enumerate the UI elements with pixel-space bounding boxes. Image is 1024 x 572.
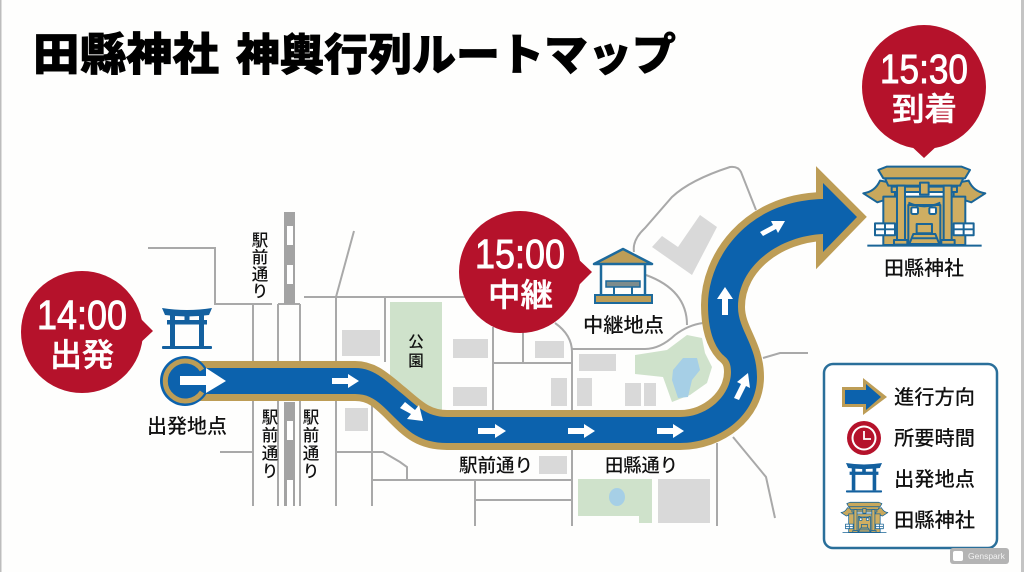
callout: 15:30 arrival: [862, 25, 986, 158]
callout: 15:30 arrival: 15:30: [880, 46, 968, 92]
title: 神輿行列ルートマップ: [236, 31, 676, 80]
label: station street lower right: 駅: [303, 409, 320, 427]
label: park: 公: [408, 333, 424, 351]
title: 田縣神社: [33, 29, 219, 80]
label: station street top: り: [252, 283, 268, 301]
badge: Genspark: Genspark: [968, 551, 1006, 561]
parks and water: [390, 302, 712, 523]
map base: roads, blocks and parks: [148, 167, 808, 526]
panel: legend: [824, 364, 997, 548]
label: station street lower left: 前: [262, 426, 278, 445]
route band with arrowhead: [160, 183, 857, 443]
legend icon: torii: [846, 463, 882, 493]
legend text: time required: 所要時間: [894, 427, 975, 450]
badge: Genspark: [950, 548, 1009, 564]
label: relay point: 中継地点: [583, 314, 664, 337]
route arrows: [332, 221, 785, 438]
legend icon: clock: [847, 421, 881, 455]
callout: 15:00 relay: 15:00: [475, 231, 565, 277]
label: station street horizontal: 駅前通り: [459, 455, 533, 476]
title: [33, 29, 676, 80]
label: station street lower left: 通: [262, 444, 279, 463]
icon: Agata shrine: [863, 167, 985, 246]
start marker: [160, 356, 226, 406]
legend text: departure point: 出発地点: [894, 468, 975, 491]
buildings: [342, 215, 717, 523]
label: station street top: 通: [252, 265, 269, 284]
label: station street lower right: 通: [303, 444, 320, 463]
legend icon: direction arrow: [842, 378, 887, 415]
icon: torii gate at departure: [162, 308, 212, 349]
label: park: 園: [408, 353, 424, 370]
label: station street top: 前: [252, 248, 268, 267]
callout: 14:00 departure: 14:00: [37, 292, 127, 338]
label: departure point: 出発地点: [147, 415, 227, 438]
callout: 15:00 relay: 中継: [488, 277, 553, 313]
label: station street lower left: 駅: [262, 409, 279, 427]
label: station street lower right: り: [303, 463, 319, 481]
label: station street top: 駅: [252, 232, 269, 250]
legend text: direction: 進行方向: [894, 386, 975, 409]
legend text: shrine: 田縣神社: [894, 509, 975, 532]
label: station street lower left: り: [262, 463, 278, 481]
label: Agata street: 田縣通り: [605, 455, 678, 476]
label: shrine name: 田縣神社: [884, 257, 964, 280]
legend icon: shrine: [841, 502, 888, 533]
roads: [148, 167, 808, 526]
callout: 15:30 arrival: 到着: [892, 91, 957, 127]
icon: relay pavilion: [594, 249, 652, 303]
callout: 14:00 departure: [21, 271, 153, 393]
callout: 14:00 departure: 出発: [50, 337, 114, 373]
callout: 15:00 relay: [459, 211, 592, 333]
railway: [284, 212, 295, 506]
label: station street lower right: 前: [303, 426, 319, 445]
